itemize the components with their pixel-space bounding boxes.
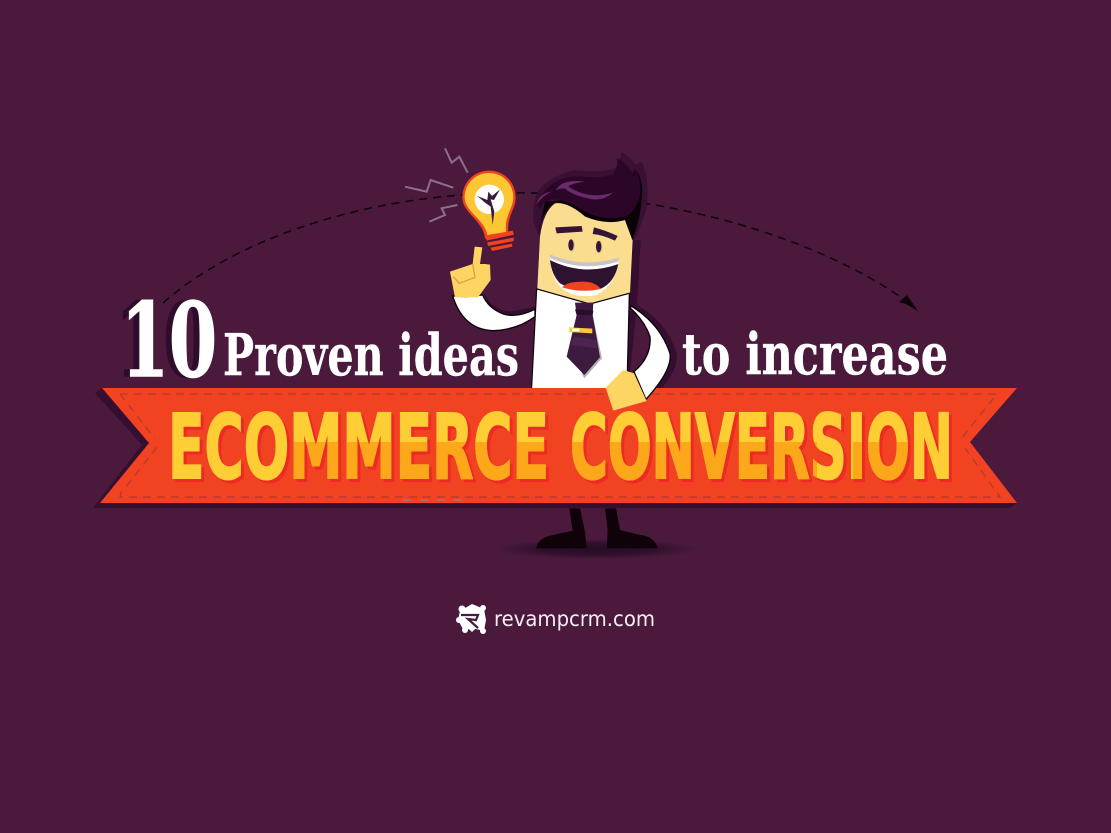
dashed arc arrow (163, 193, 918, 311)
logo icon (456, 604, 486, 634)
light bulb (462, 171, 516, 251)
ribbon stitching (120, 394, 1000, 497)
ribbon banner (100, 388, 1017, 503)
sparks (405, 148, 468, 222)
ground shadow (497, 539, 697, 559)
heading: 10: 10 (115, 281, 211, 401)
right arm and hand (606, 306, 670, 411)
necktie (567, 303, 602, 378)
headline: ECOMMERCE: ECOMMERCE (168, 395, 549, 499)
eyebrows (555, 226, 618, 241)
hair back shadow (533, 152, 648, 242)
character and bulb (405, 148, 677, 400)
small dashes under ribbon (403, 499, 462, 501)
headline: ECOMMERCE: ECOMMERCE (171, 398, 552, 502)
shirt (531, 289, 629, 400)
hair (537, 158, 642, 240)
open mouth (550, 254, 619, 296)
logo text: revampcrm.com (494, 607, 655, 631)
infographic title illustration (93, 148, 1017, 634)
ribbon shadow (93, 388, 1017, 508)
heading: Proven ideas: Proven ideas (223, 322, 519, 389)
heading: 10: 10 (121, 281, 217, 401)
eyes (568, 239, 602, 253)
heading: to increase: to increase (682, 321, 948, 388)
headline: ECOMMERCE (172, 411, 549, 484)
character legs and shoes (536, 508, 658, 548)
pointing hand (450, 247, 491, 297)
arm outer shadow (633, 303, 677, 397)
headline: CONVERSION (572, 411, 952, 484)
body shadow strip (623, 240, 641, 373)
left arm (453, 290, 535, 331)
head (537, 203, 633, 305)
hand (606, 370, 647, 411)
headline: ECOMMERCE: ECOMMERCE (168, 395, 549, 499)
